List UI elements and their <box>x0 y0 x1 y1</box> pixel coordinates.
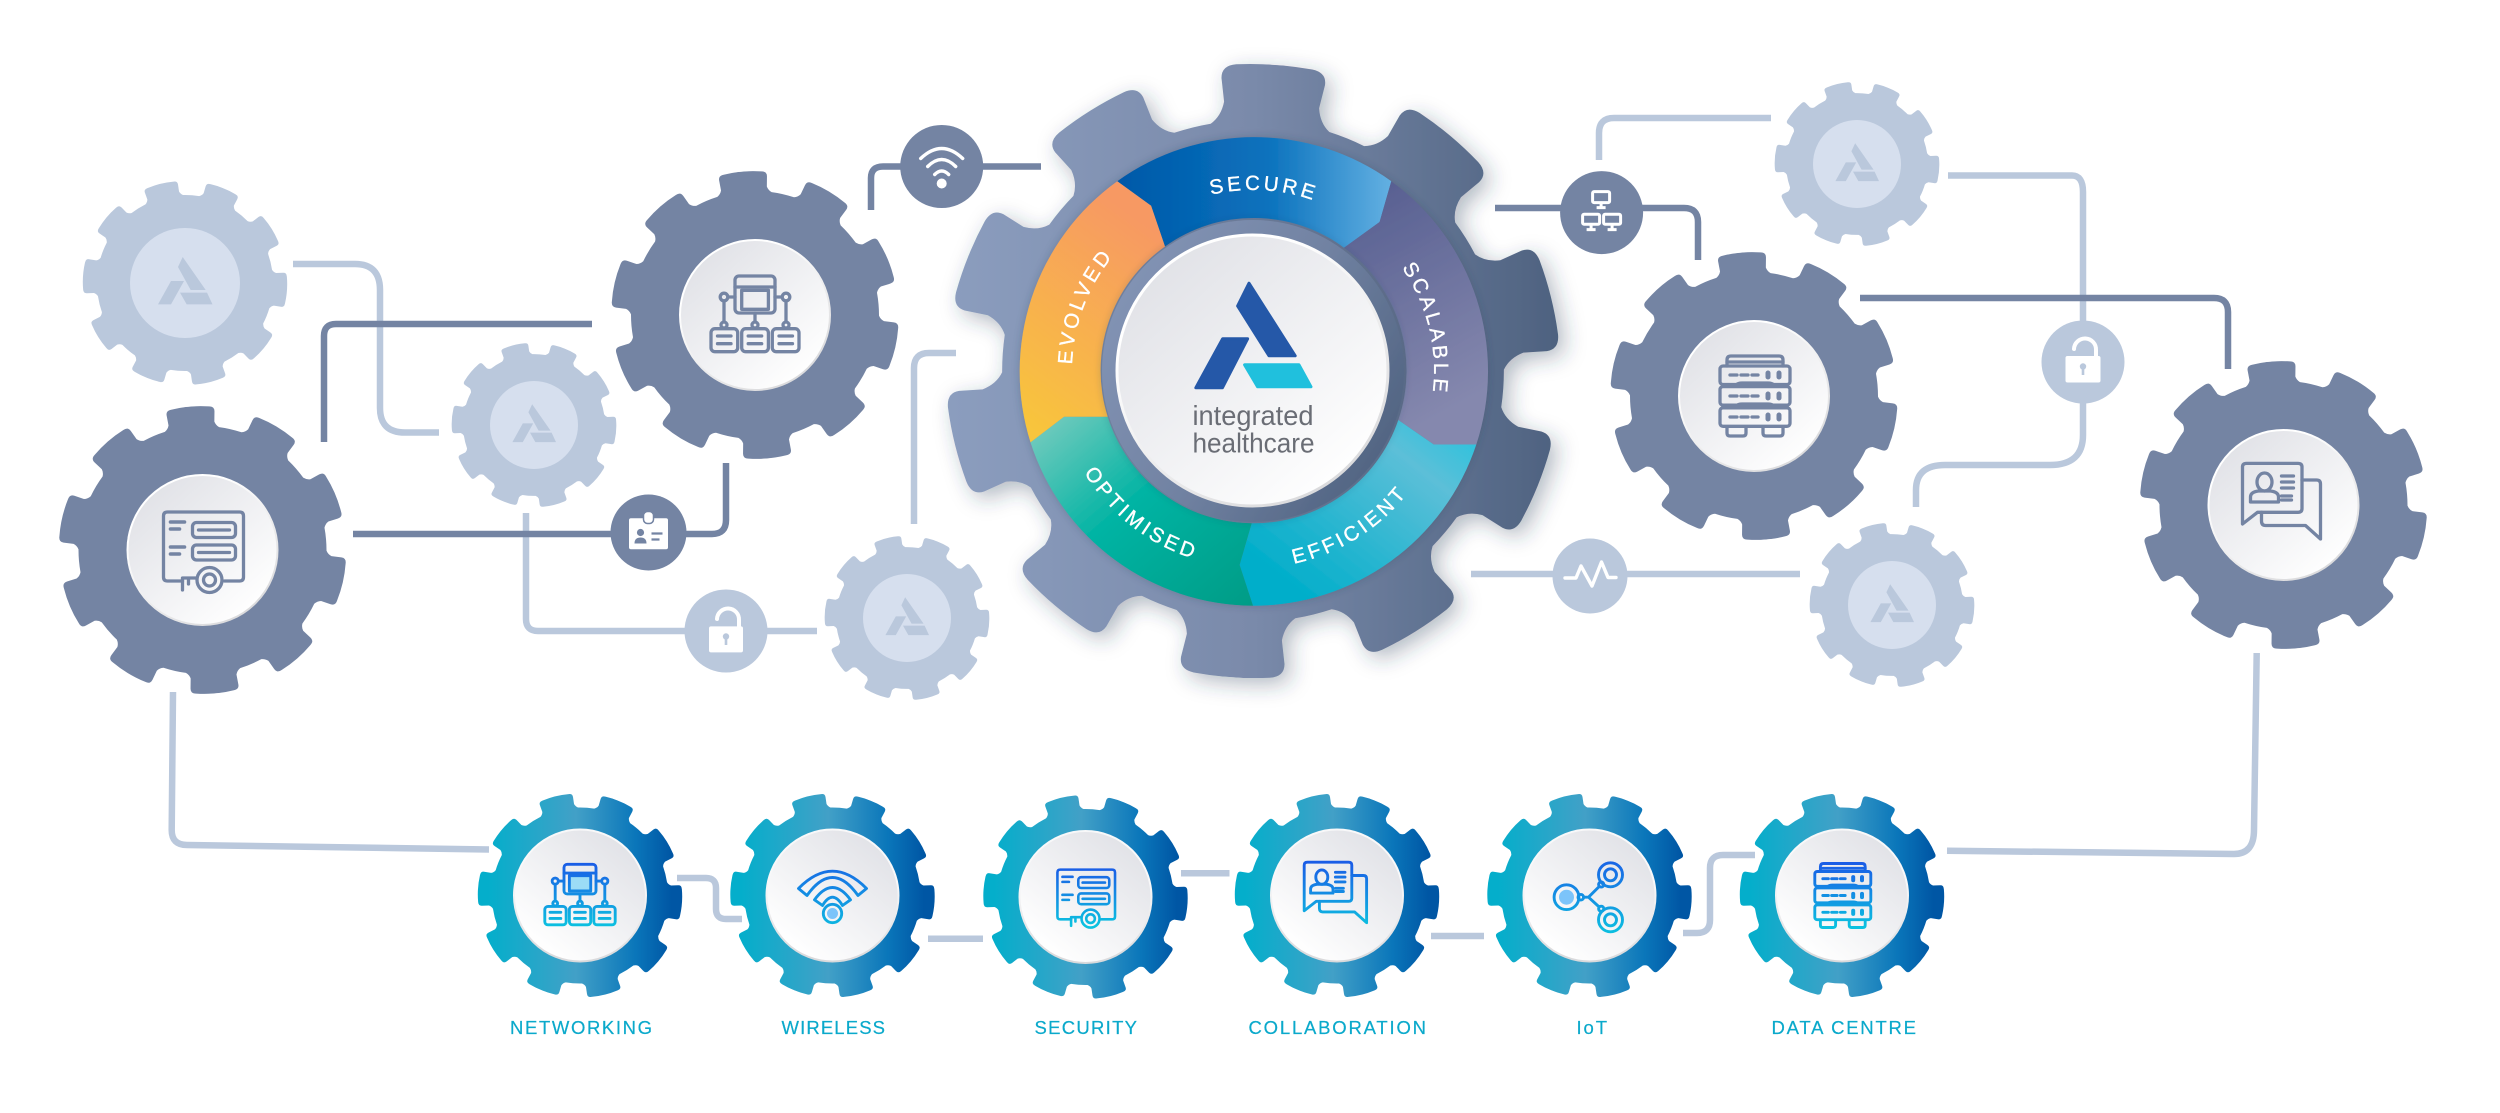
centre white disc <box>1117 235 1388 506</box>
bottom labels <box>510 1017 1916 1038</box>
icon: network diagram <box>711 276 799 352</box>
icon: server rack <box>1720 356 1790 436</box>
inner dark ring <box>1102 220 1404 522</box>
bottom gear: data centre <box>1740 794 1944 997</box>
main gear body <box>942 57 1576 698</box>
label: collaboration: COLLABORATION <box>1248 1017 1426 1038</box>
logo text line 2: healthcare <box>1192 428 1314 459</box>
label: data centre: DATA CENTRE <box>1772 1017 1916 1038</box>
icon: profile chat <box>2242 463 2320 539</box>
dark gear: data centre <box>1610 252 1898 540</box>
bottom gear: iot <box>1487 794 1692 997</box>
label: optimised: OPTIMISED <box>1086 468 1194 556</box>
label: efficient: EFFICIENT <box>1292 486 1403 564</box>
icon badge: network <box>1560 171 1643 254</box>
segment: scalable <box>1344 181 1488 444</box>
light gear: top left <box>82 182 288 384</box>
icon: certificate and key <box>164 512 244 592</box>
segment: optimised <box>1030 417 1253 606</box>
dark gear: collaboration <box>2140 361 2427 649</box>
label: security: SECURITY <box>1034 1017 1137 1038</box>
bottom gear: security <box>983 796 1188 998</box>
icon: connected nodes <box>1554 863 1622 932</box>
connector lines: light <box>172 118 2257 939</box>
segment: secure <box>1117 137 1391 248</box>
icon badge: open lock right <box>2042 320 2124 404</box>
label: secure: SECURE <box>1210 175 1316 200</box>
segment: evolved <box>1020 181 1165 442</box>
icon: server rack <box>1815 864 1871 928</box>
label: networking: NETWORKING <box>510 1017 652 1038</box>
dark gear: networking <box>612 171 898 459</box>
label: evolved: EVOLVED <box>1058 252 1109 364</box>
icon: profile chat <box>1304 862 1367 923</box>
segment: efficient <box>1240 420 1476 606</box>
icon: certificate and key <box>1057 870 1115 928</box>
light gear: lower left <box>824 536 990 700</box>
icon badge: open lock left <box>684 590 768 672</box>
icon: network diagram <box>545 864 615 925</box>
bottom gear: networking <box>478 794 682 997</box>
bottom gear: collaboration <box>1234 794 1440 997</box>
connector lines: dark <box>324 166 2228 534</box>
segmented ring <box>1020 137 1488 606</box>
light gear: top right <box>1774 82 1940 246</box>
segment labels <box>1058 175 1448 564</box>
central gear: integrated healthcare <box>942 57 1576 698</box>
icon: wifi <box>798 871 866 923</box>
icon badge: id card <box>610 494 686 570</box>
dark gear: security <box>59 406 346 694</box>
label: scalable: SCALABLE <box>1404 262 1448 392</box>
label: iot: IoT <box>1576 1017 1607 1038</box>
light gear: middle left <box>452 343 616 507</box>
label: wireless: WIRELESS <box>782 1017 885 1038</box>
integrated healthcare logo <box>1192 283 1314 459</box>
icon badge: wifi <box>900 125 983 208</box>
bottom gear: wireless <box>730 794 935 997</box>
icon badge: pulse <box>1552 538 1628 614</box>
light gear: lower right <box>1810 523 1974 687</box>
logo text: integrated <box>1192 400 1314 431</box>
